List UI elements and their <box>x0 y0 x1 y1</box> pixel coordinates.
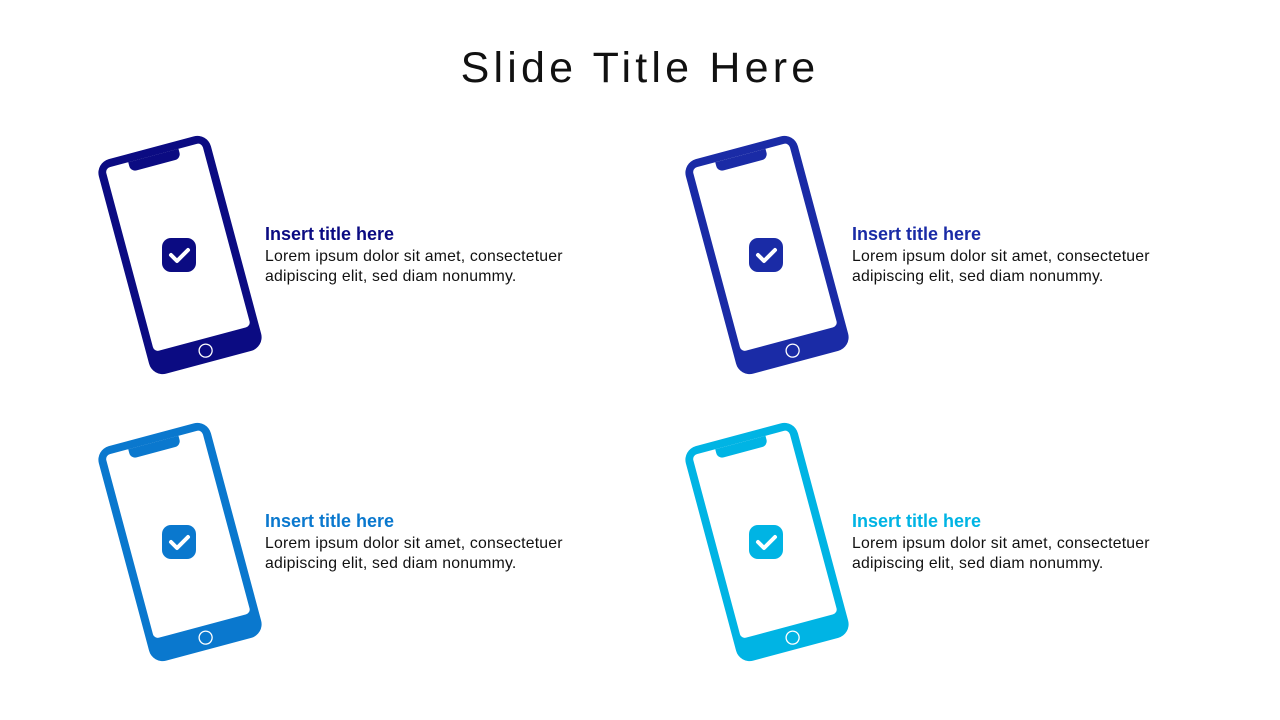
icon: phone 1 <box>98 136 262 374</box>
text block 4: Lorem ipsum dolor sit amet, consectetuer adipiscing elit, sed diam nonummy. <box>852 535 1150 572</box>
icon: phone 4 <box>685 422 849 662</box>
text block 4 <box>852 511 1150 572</box>
text block 2: Lorem ipsum dolor sit amet, consectetuer adipiscing elit, sed diam nonummy. <box>852 248 1150 284</box>
text block 2 <box>852 224 1150 284</box>
text block 1 <box>265 224 563 284</box>
text block 3: Insert title here <box>265 511 394 531</box>
text block 3: Lorem ipsum dolor sit amet, consectetuer adipiscing elit, sed diam nonummy. <box>265 535 563 572</box>
text block 4: Insert title here <box>852 511 981 531</box>
panel: item 1 <box>98 136 563 374</box>
panel: item 3 <box>98 422 563 662</box>
text block 3 <box>265 511 563 572</box>
panel: item 4 <box>685 422 1150 662</box>
text block 1: Lorem ipsum dolor sit amet, consectetuer adipiscing elit, sed diam nonummy. <box>265 248 563 284</box>
title: Slide Title Here <box>461 44 819 92</box>
icon: phone 3 <box>98 422 262 662</box>
icon: phone 2 <box>685 136 849 374</box>
panel: item 2 <box>685 136 1150 374</box>
text block 2: Insert title here <box>852 224 981 244</box>
text block 1: Insert title here <box>265 224 394 244</box>
